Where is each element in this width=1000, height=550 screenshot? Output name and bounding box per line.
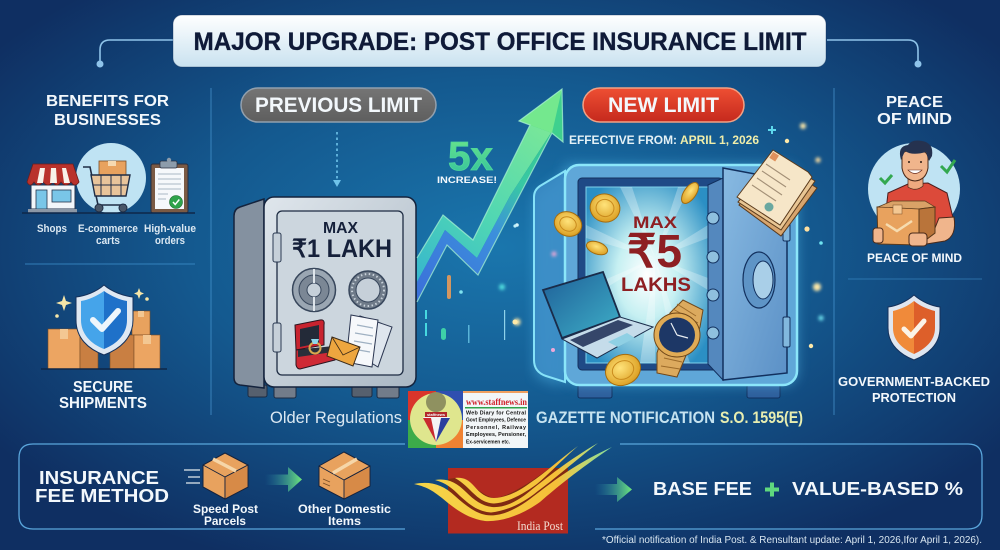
safe: new limit, open and glowing: [534, 150, 817, 398]
safe: old limit: [234, 197, 416, 398]
badge: staffnews: Ex-servicemen etc.: [466, 440, 510, 446]
icon: speed post parcel: [184, 453, 248, 499]
label: e-commerce carts: carts: [96, 235, 120, 247]
arrow: to formula: [595, 477, 632, 502]
heading: benefits for businesses: [46, 93, 169, 129]
label: speed post parcels: [193, 502, 258, 528]
panel: previous limit: [234, 88, 436, 427]
callout: 5x increase: INCREASE!: [437, 175, 497, 186]
badge: staffnews: [408, 391, 528, 448]
logo: india post: [414, 443, 612, 534]
title banner: MAJOR UPGRADE: POST OFFICE INSURANCE LIMIT: [194, 28, 806, 56]
safe label: max 1 lakh: [292, 220, 392, 263]
formula: base fee plus value-based percent: [653, 478, 963, 499]
icon: papers: [737, 150, 817, 236]
pill: previous limit: [241, 88, 436, 122]
icon: man holding parcel: [868, 140, 960, 246]
pill: new limit: NEW LIMIT: [608, 94, 719, 117]
safe label: max 5 lakhs: LAKHS: [621, 275, 691, 296]
sparkles around safe: [512, 123, 824, 352]
safe label: max 5 lakhs: MAX: [633, 213, 678, 232]
icon: e-commerce cart: [76, 143, 146, 213]
heading: benefits for businesses: BUSINESSES: [54, 112, 161, 129]
panel: benefits for businesses: [22, 93, 196, 412]
icon: laptop: [543, 272, 653, 358]
icon: orange shield: [888, 295, 940, 360]
label: e-commerce carts: [78, 223, 138, 247]
formula: base fee plus value-based percent: VALUE-BASED %: [792, 478, 963, 499]
pill: new limit: [583, 88, 744, 122]
effective date: [569, 133, 759, 147]
panel: new limit: [512, 88, 824, 427]
heading: peace of mind: [877, 94, 952, 128]
label: gazette notification: GAZETTE NOTIFICATION: [536, 408, 715, 427]
ground line: [22, 212, 195, 214]
icon: documents: [346, 315, 392, 367]
label: other domestic items: Items: [328, 514, 361, 528]
label: e-commerce carts: E-commerce: [78, 223, 138, 235]
growth arrow: [417, 89, 563, 302]
label: speed post parcels: Speed Post: [193, 502, 258, 516]
pill: previous limit: PREVIOUS LIMIT: [255, 94, 422, 117]
label: other domestic items: [298, 502, 391, 528]
label: gazette notification: S.O. 1595(E): [720, 408, 803, 427]
heading: benefits for businesses: BENEFITS FOR: [46, 93, 169, 110]
label: shops: Shops: [37, 223, 67, 235]
badge: staffnews: Personnel, Railway: [466, 425, 526, 431]
badge: staffnews: Employees, Pensioner,: [466, 432, 526, 438]
label: high-value orders: [144, 223, 196, 247]
effective date: APRIL 1, 2026: [680, 133, 759, 147]
label: high-value orders: High-value: [144, 223, 196, 235]
callout: 5x increase: 5x: [448, 133, 493, 179]
badge: staffnews: www.staffnews.in: [466, 397, 527, 407]
badge: staffnews: Web Diary for Central: [466, 410, 526, 416]
label: high-value orders: orders: [155, 235, 185, 247]
door: [707, 168, 790, 380]
safe dial: left: [292, 268, 336, 312]
label: speed post parcels: Parcels: [204, 514, 246, 528]
label: peace of mind: PEACE OF MIND: [867, 251, 962, 265]
footnote: *Official notification of India Post. & Rensultant update: April 1, 2026,Ifor April 1, 2026).: [602, 535, 982, 546]
label: government-backed protection: GOVERNMENT-BACKED: [838, 374, 990, 389]
badge: staffnews: Govt Employees, Defence: [466, 418, 526, 424]
safe label: max 1 lakh: ₹1 LAKH: [292, 235, 392, 263]
safe label: max 1 lakh: MAX: [323, 220, 358, 237]
title banner: [96, 15, 922, 68]
heading: insurance fee method: INSURANCE: [39, 468, 159, 488]
label: government-backed protection: [838, 374, 990, 405]
icon: ring box: [295, 320, 335, 369]
heading: peace of mind: PEACE: [886, 94, 943, 111]
icon: other domestic parcel: [319, 452, 370, 499]
logo: india post: India Post: [517, 519, 563, 533]
sparkles around arrow: [425, 223, 520, 343]
icon: shield and parcels: [41, 285, 167, 369]
heading: insurance fee method: [35, 468, 169, 506]
label: secure shipments: SECURE: [73, 379, 133, 396]
icon: coins: [550, 180, 702, 391]
icon: shop: [27, 164, 79, 213]
icon: high-value order clipboard: [151, 158, 188, 213]
badge: staffnews: staffnews: [427, 413, 445, 417]
arrow: parcels to domestic: [265, 467, 302, 492]
icon: watch: [654, 300, 703, 377]
label: older regulations: Older Regulations: [270, 408, 402, 427]
label: secure shipments: SHIPMENTS: [59, 395, 147, 412]
panel: peace of mind: [838, 94, 990, 405]
label: other domestic items: Other Domestic: [298, 502, 391, 516]
heading: insurance fee method: FEE METHOD: [35, 486, 169, 506]
panel outline: [19, 444, 982, 529]
panel: insurance fee method: [19, 443, 982, 546]
effective date: EFFECTIVE FROM:: [569, 133, 677, 147]
heading: peace of mind: OF MIND: [877, 111, 952, 128]
label: government-backed protection: PROTECTION: [872, 390, 956, 405]
formula: base fee plus value-based percent: BASE FEE: [653, 478, 752, 499]
label: secure shipments: [59, 379, 147, 412]
safe label: max 5 lakhs: [621, 213, 691, 296]
safe label: max 5 lakhs: ₹5: [627, 225, 682, 277]
safe dial: right: [349, 271, 387, 309]
arrow: dotted down: [333, 132, 341, 187]
callout: 5x increase: [437, 133, 497, 186]
icon: envelope: [327, 337, 360, 366]
